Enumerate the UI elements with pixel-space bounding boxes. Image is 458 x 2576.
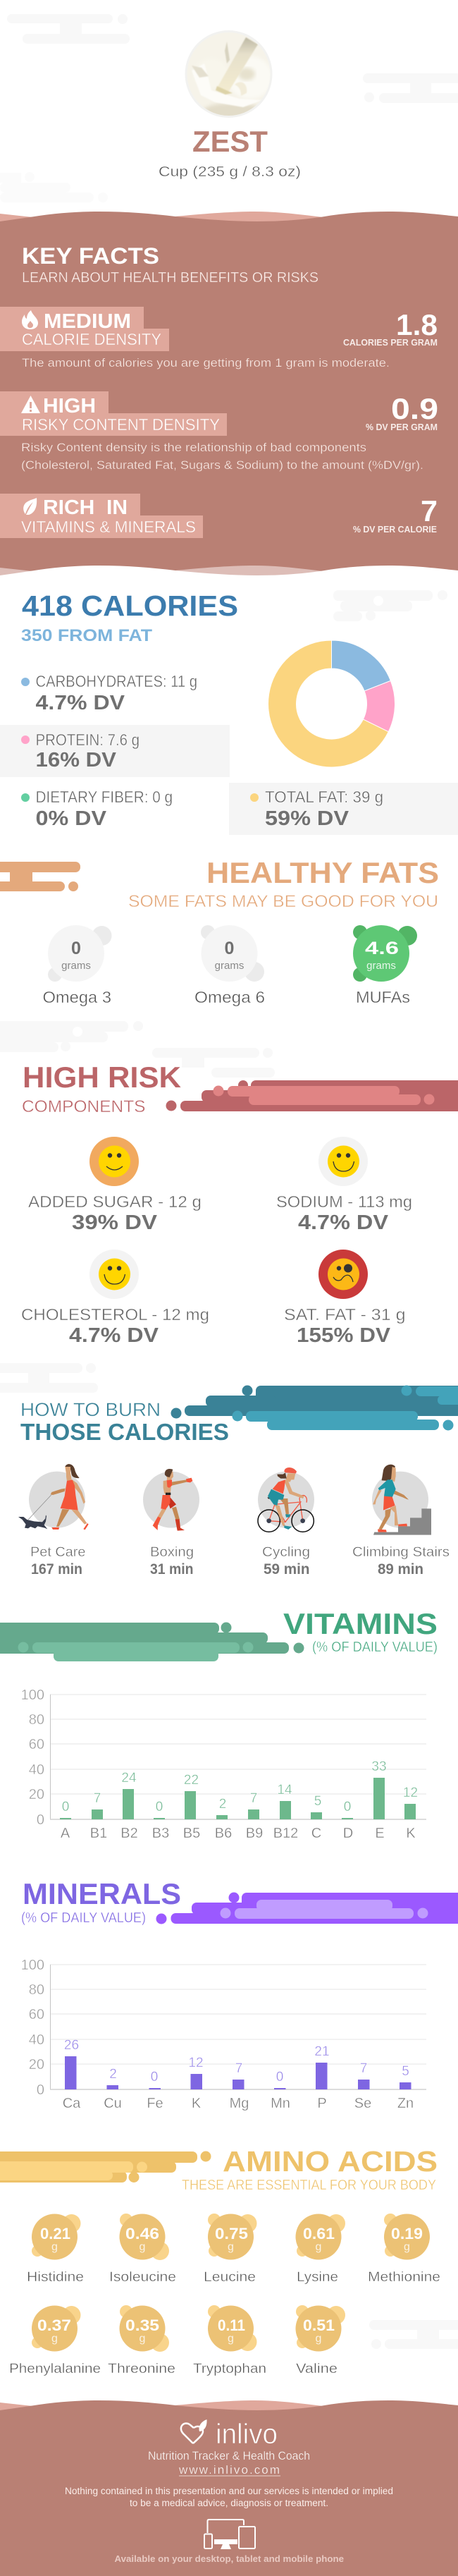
amino acid: methionine: 0.19 (391, 2225, 423, 2242)
heading: those calories: THOSE CALORIES (20, 1419, 229, 1445)
stat: MUFAs: MUFAs (356, 988, 410, 1006)
amino acid: isoleucine (109, 2214, 176, 2285)
amino acid: lysine (296, 2214, 345, 2285)
subheading: percent of daily value: (% OF DAILY VALUE) (312, 1640, 438, 1655)
heading: minerals: MINERALS (23, 1877, 181, 1910)
amino acid: methionine: Methionine (368, 2270, 440, 2285)
exercise: climbing stairs: Climbing Stairs (352, 1545, 450, 1560)
heading: vitamins: VITAMINS (283, 1607, 438, 1640)
text: risky content note: Risky Content density is the relationship of bad components (21, 441, 366, 454)
stat: total fat (229, 783, 458, 835)
bar chart: minerals (21, 1958, 426, 2111)
bar chart: vitamins: 60 (29, 1737, 44, 1752)
amino acid: valine (296, 2305, 345, 2376)
bar chart: minerals: 0 (37, 2082, 44, 2098)
bar chart: minerals: 21 (314, 2044, 330, 2059)
amino acid: valine: 0.51 (303, 2316, 335, 2334)
bar chart: vitamins: D (343, 1826, 353, 1841)
stat: carbohydrates: 4.7% DV (35, 692, 125, 714)
bar chart: vitamins: B3 (152, 1826, 169, 1841)
panel: footer (0, 2400, 458, 2576)
bar chart: minerals: 0 (276, 2070, 283, 2084)
heading: amino acids: AMINO ACIDS (223, 2145, 438, 2178)
exercise: cycling: Cycling (262, 1545, 310, 1560)
exercise: pet care: 167 min (31, 1561, 82, 1577)
stat: total fat: 59% DV (265, 807, 349, 830)
stat: 7 percent DV per calorie: 7 (421, 494, 438, 527)
amino acid: phenylalanine: Phenylalanine (9, 2362, 101, 2376)
stat: protein (0, 725, 230, 777)
stat: 1.8 calories per gram (343, 308, 438, 348)
amino acid: methionine: g (404, 2241, 410, 2253)
bar chart: minerals: 0 (151, 2070, 158, 2084)
risk item: cholesterol: CHOLESTEROL - 12 mg (21, 1305, 209, 1324)
heading: healthy fats: HEALTHY FATS (206, 856, 439, 889)
text: risky content note (21, 441, 423, 472)
stat: MUFAs: 4.6 (365, 939, 399, 958)
bar chart: minerals: P (317, 2096, 327, 2111)
bar chart: vitamins: E (375, 1826, 385, 1841)
risk item: sodium: 4.7% DV (298, 1211, 389, 1234)
stat: omega 6: grams (215, 960, 244, 972)
disclaimer: Nothing contained in this presentation and our services is intended or implied (65, 2486, 393, 2496)
bar chart: vitamins: 0 (156, 1800, 163, 1814)
subheading: amino acids: THESE ARE ESSENTIAL FOR YOUR BODY (182, 2178, 436, 2193)
bar chart: minerals: 7 (360, 2061, 367, 2076)
icon: smiley (318, 1137, 368, 1186)
amino acid: phenylalanine: 0.37 (37, 2316, 71, 2334)
heading: 418 calories: 418 CALORIES (22, 590, 238, 622)
amino acid: isoleucine: Isoleucine (109, 2270, 176, 2285)
icon: flame (22, 310, 38, 329)
bar chart: vitamins: 80 (29, 1712, 44, 1728)
bar chart: vitamins: B2 (120, 1826, 138, 1841)
bar chart: vitamins: B9 (246, 1826, 263, 1841)
bar chart: minerals: 2 (109, 2067, 117, 2082)
label: calorie density: CALORIE DENSITY (22, 330, 161, 348)
amino acid: leucine: g (228, 2241, 234, 2253)
bar chart: vitamins: B6 (215, 1826, 232, 1841)
stat: omega 3 (42, 925, 111, 1006)
risk item: added sugar: 39% DV (72, 1211, 158, 1234)
icon: cyclist (258, 1467, 314, 1532)
bar chart: minerals: 80 (29, 1982, 44, 1998)
risk item: saturated fat: SAT. FAT - 31 g (284, 1305, 406, 1324)
heading: how to burn: HOW TO BURN (20, 1399, 161, 1420)
bar chart: minerals: K (192, 2096, 202, 2111)
bar chart: vitamins: A (61, 1826, 70, 1841)
panel: key facts (0, 212, 458, 585)
stat: omega 6: Omega 6 (194, 988, 265, 1006)
label: vitamins and minerals: VITAMINS & MINERALS (21, 518, 196, 536)
risk item: saturated fat (284, 1250, 406, 1347)
label: rich in: RICH IN (43, 496, 128, 519)
website link: www.inlivo.com (178, 2463, 280, 2477)
logo: inlivo: inlivo (216, 2419, 278, 2450)
text: risky content note: (Cholesterol, Saturated Fat, Sugars & Sodium) to the amount (%DV/gr). (21, 458, 423, 472)
stat: MUFAs: grams (366, 960, 396, 972)
bar chart: minerals: 5 (402, 2064, 409, 2079)
amino acid: lysine: Lysine (297, 2270, 338, 2285)
bar chart: minerals: 20 (29, 2057, 44, 2073)
amino acid: lysine: g (316, 2241, 321, 2253)
heading: key facts: KEY FACTS (22, 243, 159, 269)
stat: omega 3: 0 (71, 939, 81, 958)
disclaimer (65, 2486, 393, 2508)
risk item: sodium (276, 1137, 412, 1234)
subheading: components: COMPONENTS (22, 1097, 145, 1116)
amino acid: valine: Valine (296, 2362, 338, 2376)
bar chart: vitamins: 2 (219, 1797, 226, 1812)
amino acid: tryptophan: 0.11 (218, 2316, 245, 2334)
bar chart: vitamins (21, 1687, 426, 1841)
decoration: minerals banner (156, 1893, 458, 1924)
serving size: Cup (235 g / 8.3 oz) (159, 164, 301, 180)
exercise: boxing (143, 1469, 199, 1577)
bar chart: vitamins: 12 (403, 1786, 418, 1800)
amino acid: threonine (108, 2305, 175, 2376)
bar chart: minerals: Mn (271, 2096, 290, 2111)
bar chart: vitamins: 40 (29, 1762, 44, 1778)
stat: dietary fiber (21, 788, 173, 830)
risk item: cholesterol (21, 1250, 209, 1347)
bar chart: minerals: 12 (188, 2056, 204, 2070)
bar chart: minerals: 40 (29, 2032, 44, 2048)
donut chart: macronutrients (268, 640, 395, 767)
stat: dietary fiber: DIETARY FIBER: 0 g (35, 788, 173, 806)
bar chart: vitamins: 100 (21, 1687, 44, 1703)
disclaimer: to be a medical advice, diagnosis or treatment. (130, 2498, 328, 2508)
risk item: cholesterol: 4.7% DV (69, 1324, 159, 1347)
stat: carbohydrates (21, 672, 197, 714)
bar chart: minerals: 7 (235, 2061, 242, 2076)
stat: MUFAs (353, 925, 417, 1006)
bar chart: vitamins: 22 (184, 1773, 199, 1788)
amino acid: tryptophan: Tryptophan (193, 2362, 266, 2376)
amino acid: tryptophan (193, 2305, 266, 2376)
stat: 0.9 percent DV per gram (366, 392, 438, 432)
bar chart: vitamins: B1 (90, 1826, 107, 1841)
amino acid: lysine: 0.61 (303, 2225, 335, 2242)
bar chart: minerals: 100 (21, 1958, 44, 1973)
bar chart: minerals: Ca (63, 2096, 81, 2111)
amino acid: histidine: 0.21 (40, 2225, 70, 2242)
bar chart: vitamins: K (406, 1826, 416, 1841)
exercise: cycling (258, 1467, 314, 1577)
exercise: climbing stairs (352, 1465, 450, 1577)
stat: omega 3: Omega 3 (42, 988, 111, 1006)
amino acid: leucine: Leucine (204, 2270, 256, 2285)
amino acid: threonine: g (140, 2333, 145, 2345)
icon: woman on stairs (372, 1465, 431, 1535)
decoration: vitamins banner (0, 1622, 304, 1661)
subheading: healthy fats: SOME FATS MAY BE GOOD FOR YOU (128, 892, 438, 911)
exercise: cycling: 59 min (264, 1561, 310, 1577)
amino acid: phenylalanine: g (51, 2333, 58, 2345)
subheading: 350 from fat: 350 FROM FAT (21, 626, 152, 645)
decoration: high risk banner (166, 1080, 458, 1111)
stat: protein: 16% DV (35, 749, 117, 771)
amino acid: valine: g (316, 2333, 321, 2345)
exercise: boxing: Boxing (150, 1545, 194, 1560)
amino acid: threonine: 0.35 (125, 2316, 159, 2334)
bar chart: minerals: 60 (29, 2007, 44, 2022)
badge: high risky content density (0, 391, 227, 436)
tagline: Nutrition Tracker & Health Coach (148, 2449, 310, 2462)
bar chart: minerals: Mg (230, 2096, 249, 2111)
badge: rich in vitamins and minerals (0, 494, 203, 538)
amino acid: tryptophan: g (228, 2333, 234, 2345)
stat: 1.8 calories per gram: 1.8 (396, 308, 438, 341)
stat: 7 percent DV per calorie: % DV PER CALORIE (353, 525, 437, 535)
amino acid: leucine: 0.75 (215, 2225, 248, 2242)
icon: smiley (89, 1250, 139, 1299)
amino acid: isoleucine: 0.46 (125, 2225, 159, 2242)
amino acid: threonine: Threonine (108, 2362, 175, 2376)
bar chart: vitamins: C (311, 1826, 321, 1841)
stat: total fat: TOTAL FAT: 39 g (265, 788, 383, 806)
exercise: pet care (18, 1464, 89, 1577)
bar chart: vitamins: 20 (29, 1787, 44, 1802)
icon: boxer (143, 1469, 199, 1531)
exercise: pet care: Pet Care (30, 1545, 86, 1560)
amino acid: phenylalanine (9, 2306, 101, 2376)
stat: omega 6: 0 (225, 939, 234, 958)
amino acid: histidine (27, 2214, 84, 2285)
bar chart: vitamins: 5 (314, 1794, 321, 1809)
stat: omega 3: grams (61, 960, 91, 972)
icon: leaf (23, 498, 37, 515)
amino acid: isoleucine: g (140, 2241, 145, 2253)
stat: carbohydrates: CARBOHYDRATES: 11 g (35, 672, 197, 690)
bar chart: vitamins: B5 (183, 1826, 200, 1841)
amino acid: leucine (204, 2214, 256, 2285)
stat: protein: PROTEIN: 7.6 g (35, 731, 140, 749)
label: high: HIGH (43, 395, 96, 417)
heading: high risk: HIGH RISK (23, 1061, 181, 1094)
risk item: added sugar (28, 1137, 202, 1234)
stat: 7 percent DV per calorie (353, 494, 438, 535)
bar chart: vitamins: 0 (37, 1812, 44, 1828)
exercise: climbing stairs: 89 min (378, 1561, 423, 1577)
bar chart: vitamins: B12 (273, 1826, 298, 1841)
subheading: percent of daily value: (% OF DAILY VALUE) (21, 1910, 146, 1926)
risk item: added sugar: ADDED SUGAR - 12 g (28, 1192, 202, 1211)
amino acid: histidine: Histidine (27, 2270, 84, 2285)
decoration: burn banner (171, 1385, 458, 1430)
bar chart: minerals: Fe (147, 2096, 163, 2111)
bar chart: vitamins: 0 (62, 1800, 69, 1814)
icon: smiley (89, 1137, 139, 1186)
amino acid: histidine: g (51, 2241, 58, 2253)
bar chart: minerals: 26 (64, 2038, 79, 2053)
stat: 0.9 percent DV per gram: 0.9 (391, 392, 438, 425)
stat: omega 6 (194, 925, 265, 1006)
badge: medium calorie density (0, 307, 169, 351)
bar chart: minerals: Cu (104, 2096, 122, 2111)
exercise: boxing: 31 min (150, 1561, 193, 1577)
bar chart: vitamins: 7 (94, 1791, 101, 1806)
bar chart: vitamins: 14 (277, 1783, 292, 1797)
bar chart: vitamins: 24 (121, 1771, 137, 1786)
bar chart: vitamins: 0 (344, 1800, 351, 1814)
decoration: healthy fats banner (0, 862, 80, 891)
decoration: amino acids banner (0, 2151, 211, 2183)
bar chart: minerals: Se (354, 2096, 371, 2111)
stat: 1.8 calories per gram: CALORIES PER GRAM (343, 338, 438, 348)
bar chart: vitamins: 33 (371, 1759, 387, 1774)
label: medium: MEDIUM (44, 310, 131, 333)
food photo: milk splash (183, 28, 275, 120)
bar chart: vitamins: 7 (250, 1791, 257, 1806)
risk item: saturated fat: 155% DV (297, 1324, 391, 1347)
logo: inlivo (181, 2419, 278, 2450)
icon: woman walking dog (18, 1464, 89, 1530)
risk item: sodium: SODIUM - 113 mg (276, 1192, 412, 1211)
subheading: LEARN ABOUT HEALTH BENEFITS OR RISKS (22, 270, 318, 286)
icon: warning triangle (21, 396, 40, 413)
bar chart: minerals: Zn (397, 2096, 414, 2111)
amino acid: methionine (368, 2214, 440, 2285)
stat: dietary fiber: 0% DV (35, 807, 107, 830)
label: risky content density: RISKY CONTENT DENSITY (22, 415, 220, 434)
icon: devices (204, 2520, 255, 2549)
stat: 0.9 percent DV per gram: % DV PER GRAM (366, 422, 438, 432)
text: calorie density note: The amount of calories you are getting from 1 gram is moderate. (22, 356, 390, 370)
title: ZEST (192, 125, 268, 158)
icon: unhappy face (318, 1250, 368, 1299)
availability note: Available on your desktop, tablet and mobile phone (114, 2553, 344, 2564)
